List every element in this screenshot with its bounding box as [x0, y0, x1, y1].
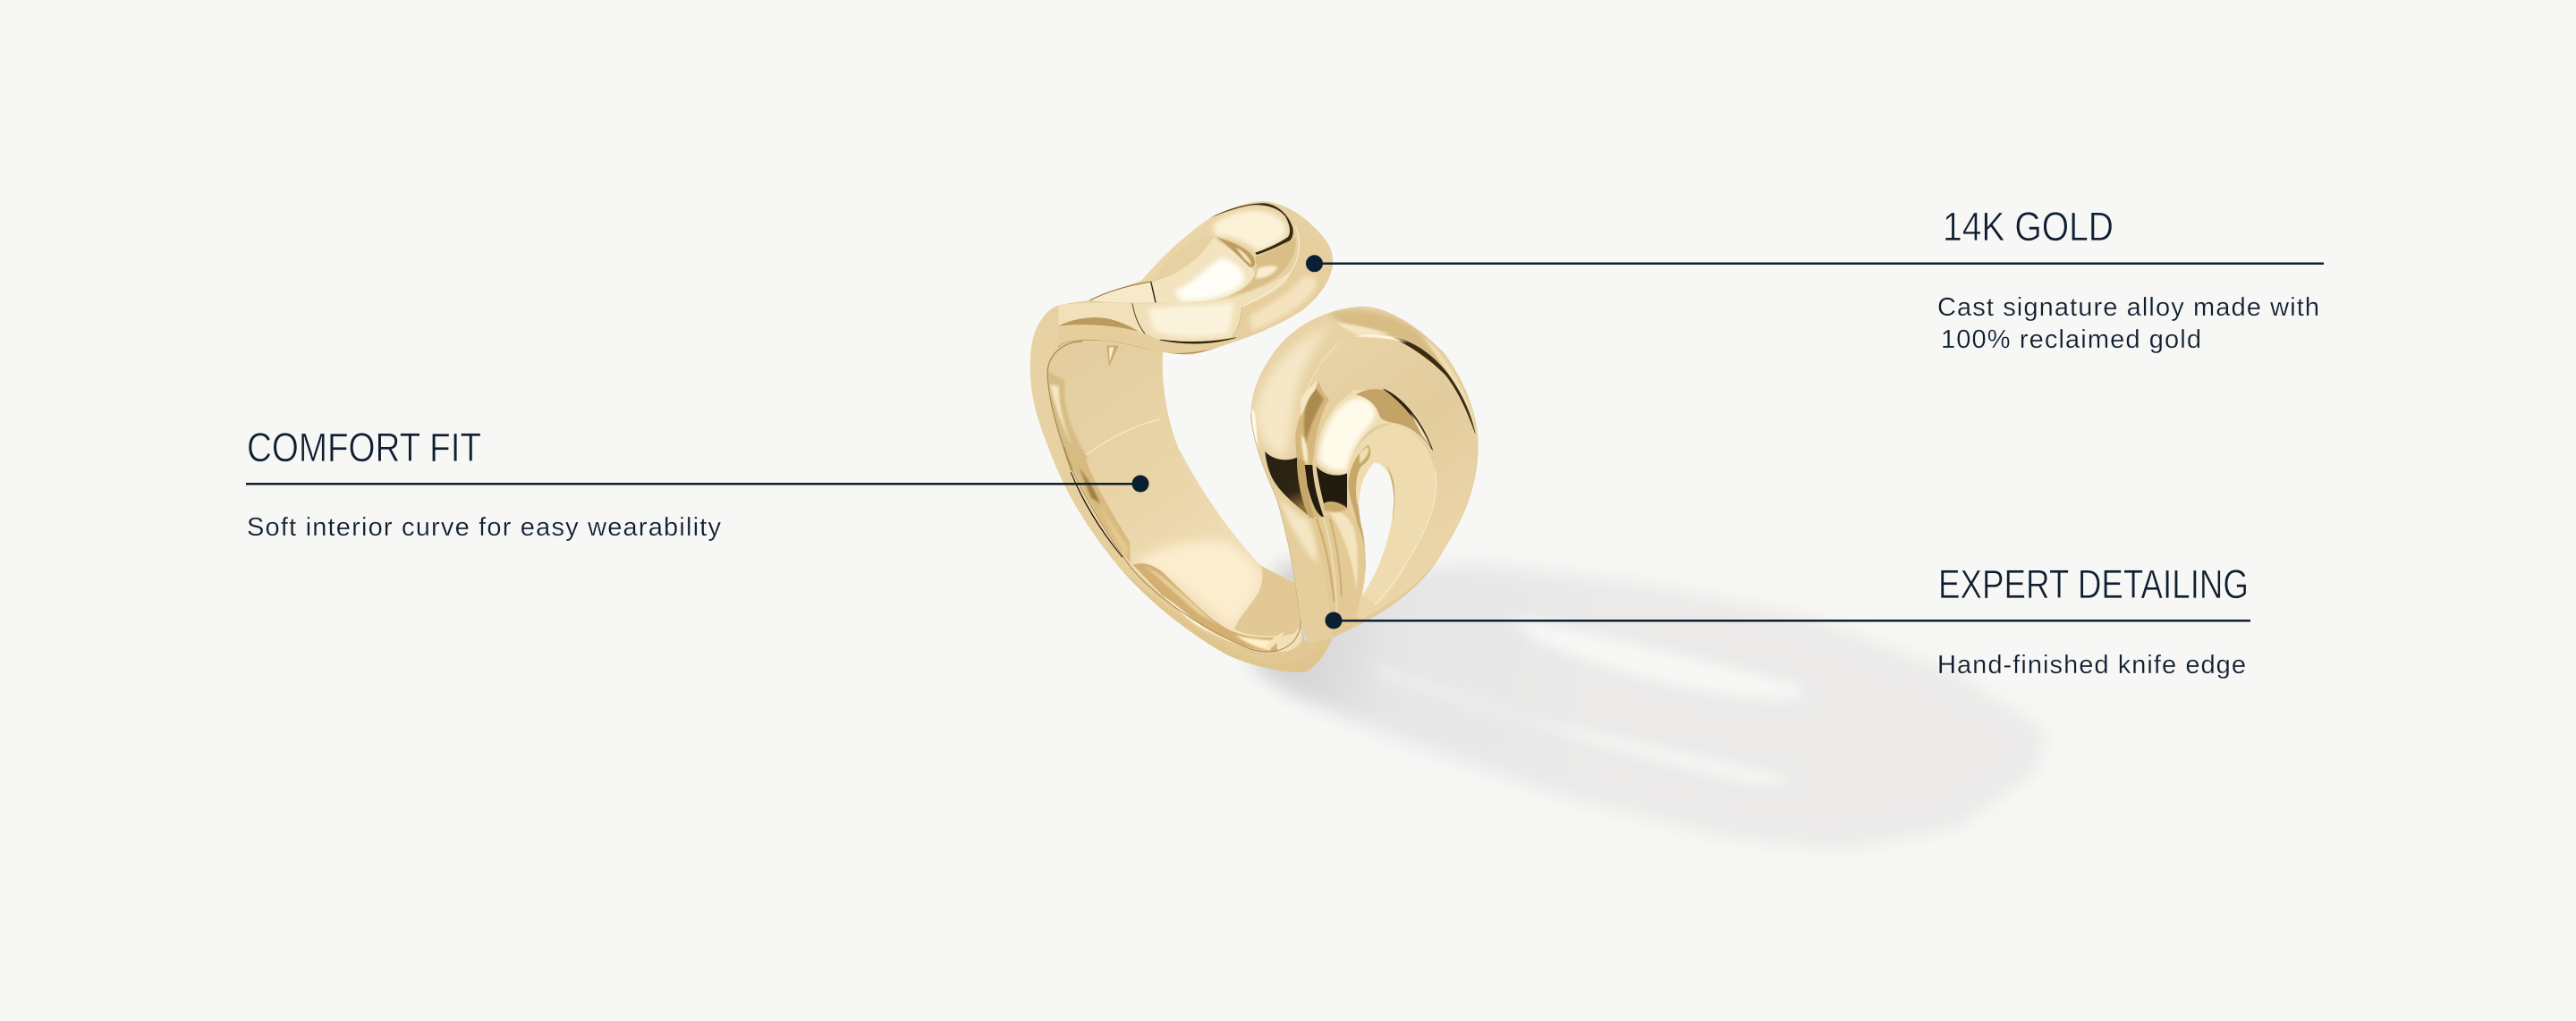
left strip — [1058, 302, 1145, 333]
dark reflection one — [1265, 451, 1310, 517]
gold edge strip between dark reflections — [1297, 458, 1314, 519]
dark narrow sliver — [1305, 465, 1324, 517]
heading: expert detailing: EXPERT DETAILING — [1938, 561, 2249, 607]
front band left edge — [1250, 414, 1303, 641]
third loop bright blob — [1317, 390, 1434, 475]
dark underside — [1160, 338, 1236, 343]
callout dot: expert detailing — [1326, 612, 1342, 629]
callout: comfort fit — [246, 425, 1148, 542]
slit — [1058, 317, 1139, 332]
front band lower face — [1301, 620, 1307, 638]
callout dot: comfort fit — [1132, 476, 1148, 492]
callout dot: 14K gold — [1306, 255, 1323, 272]
lower right wall — [1234, 566, 1303, 637]
callout line: 14K gold — [1315, 263, 2324, 265]
inner front bright face — [1152, 238, 1255, 303]
top lobe dark edge lines — [1210, 203, 1293, 255]
top lobe — [1041, 201, 1333, 355]
bottom rim edge shading — [1118, 566, 1331, 672]
description: 14K gold — [1937, 293, 2319, 354]
gold wedge with dark ridge — [1356, 389, 1434, 453]
middle wide strip — [1132, 271, 1291, 342]
callout: 14K gold — [1306, 204, 2324, 354]
left rim reflection strip — [1073, 460, 1132, 565]
heading: 14K gold: 14K GOLD — [1943, 204, 2114, 249]
callout line: expert detailing — [1334, 620, 2250, 622]
left front strip — [1089, 282, 1156, 303]
right inner gold — [1228, 237, 1296, 297]
ring — [1029, 197, 1485, 672]
bright centre of wall — [1133, 541, 1259, 629]
upper inner rim edge — [1047, 342, 1082, 471]
outer crescent — [1268, 266, 1333, 329]
back inner surface — [1142, 217, 1211, 280]
description: 14K gold: 100% reclaimed gold — [1941, 325, 2201, 354]
bottom reflection — [1133, 563, 1277, 653]
interior seam line — [1086, 419, 1160, 455]
right lobe and front band — [1246, 301, 1485, 650]
wall right edge — [1178, 447, 1295, 583]
lobe teardrop opening — [1359, 463, 1394, 595]
description: expert detailing: Hand-finished knife edge — [1937, 651, 2246, 679]
callout line: comfort fit — [246, 483, 1140, 485]
band outer rim — [1030, 304, 1333, 672]
small reflection on upper wall — [1106, 346, 1119, 367]
heading: comfort fit: COMFORT FIT — [247, 425, 481, 470]
ring cast shadow — [1252, 563, 2046, 850]
lower central ridged strip — [1310, 508, 1366, 637]
dark inner rim line — [1071, 472, 1123, 557]
second matte layer — [1356, 342, 1474, 620]
band interior wall — [1048, 345, 1302, 652]
callout: expert detailing — [1326, 561, 2250, 679]
description: comfort fit: Soft interior curve for easy wearability — [247, 513, 721, 542]
description: 14K gold: Cast signature alloy made with — [1937, 293, 2319, 322]
inner rim edge — [1064, 447, 1301, 652]
upper rim reflection strip — [1046, 371, 1089, 471]
fourth inner loop — [1348, 424, 1436, 605]
outer layer bright zone — [1255, 325, 1330, 459]
folded detail — [1216, 237, 1255, 267]
left reflective strip — [1295, 380, 1329, 517]
dark reflection two — [1317, 467, 1347, 508]
dark ridge wedge — [1393, 338, 1475, 434]
inner reflection around opening — [1349, 445, 1370, 572]
lower strip — [1159, 329, 1267, 354]
